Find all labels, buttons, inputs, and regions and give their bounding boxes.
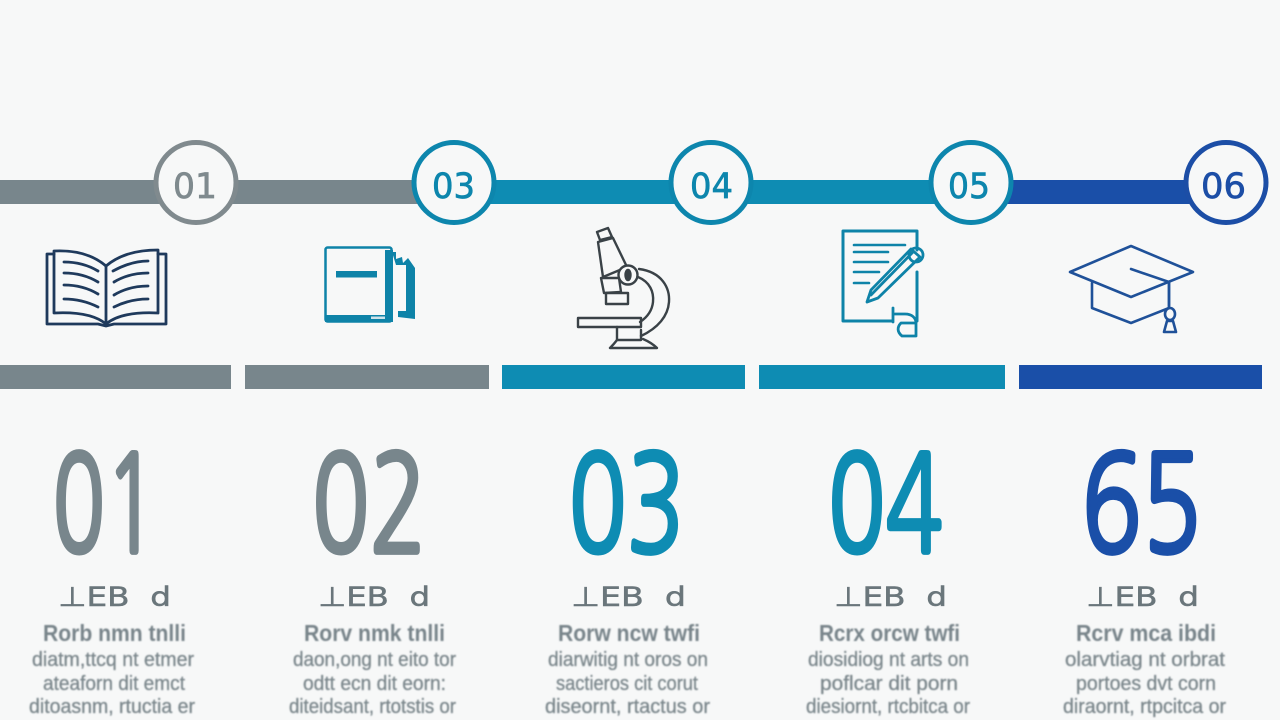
step bars — [0, 365, 1262, 389]
label: ⊥EB d — [1086, 582, 1199, 613]
big number 02: 02 — [312, 438, 427, 572]
column 4 — [806, 438, 970, 718]
timeline — [0, 142, 1266, 222]
text block: odtt ecn dit eorn: — [303, 673, 446, 695]
text block: Rcrv mca ibdi — [1076, 620, 1216, 646]
column 5 — [1063, 438, 1226, 718]
text block — [545, 620, 710, 718]
big number 01: 01 — [53, 438, 158, 572]
column 3 — [545, 438, 710, 718]
text block: Rcrx orcw twfi — [819, 620, 960, 646]
step marker 06: 06 — [1201, 167, 1246, 207]
step marker 05 — [931, 142, 1011, 222]
text block: daon,ong nt eito tor — [293, 649, 456, 671]
label: ⊥EB d — [571, 582, 686, 613]
step marker 04 — [671, 142, 751, 222]
text block — [806, 620, 970, 718]
text block: portoes dvt corn — [1076, 673, 1216, 695]
step marker 06 — [1186, 142, 1266, 222]
step marker 01 — [156, 142, 236, 222]
text block: diosidiog nt arts on — [808, 649, 969, 671]
icon: graduation cap — [1070, 246, 1193, 332]
label: ⊥EB d — [834, 582, 947, 613]
text block: Rorv nmk tnlli — [304, 620, 445, 646]
label: ⊥EB d — [58, 582, 171, 613]
text block — [29, 620, 195, 718]
label: ⊥EB d — [318, 582, 430, 613]
big number 04: 04 — [828, 438, 943, 572]
text block: diesiornt, rtcbitca or — [806, 696, 970, 718]
text block: sactieros cit corut — [556, 673, 698, 695]
icon: document and pencil — [843, 231, 923, 336]
step marker 05: 05 — [948, 167, 990, 207]
icon: notebook — [325, 248, 415, 322]
big number 65: 65 — [1082, 438, 1202, 572]
text block: poflcar dit porn — [820, 673, 958, 695]
text block: diteidsant, rtotstis or — [289, 696, 456, 718]
text block: diatm,ttcq nt etmer — [32, 649, 194, 671]
text block: olarvtiag nt orbrat — [1065, 649, 1225, 671]
column 1 — [29, 438, 195, 718]
text block — [289, 620, 456, 718]
step marker 03 — [414, 142, 494, 222]
step marker 04: 04 — [690, 167, 733, 207]
text block: Rorb nmn tnlli — [43, 620, 186, 646]
big number 03: 03 — [569, 438, 685, 572]
icon: open book — [47, 250, 166, 326]
column 2 — [289, 438, 456, 718]
text block — [1063, 620, 1226, 718]
text block: diraornt, rtpcitca or — [1063, 696, 1226, 718]
icon: microscope — [578, 228, 669, 348]
text block: ateaforn dit emct — [43, 673, 185, 695]
text block: ditoasnm, rtuctia er — [29, 696, 195, 718]
text block: Rorw ncw twfi — [558, 620, 700, 646]
step marker 01: 01 — [173, 167, 217, 207]
text block: diseornt, rtactus or — [545, 696, 710, 718]
text block: diarwitig nt oros on — [548, 649, 708, 671]
step marker 03: 03 — [432, 167, 475, 207]
